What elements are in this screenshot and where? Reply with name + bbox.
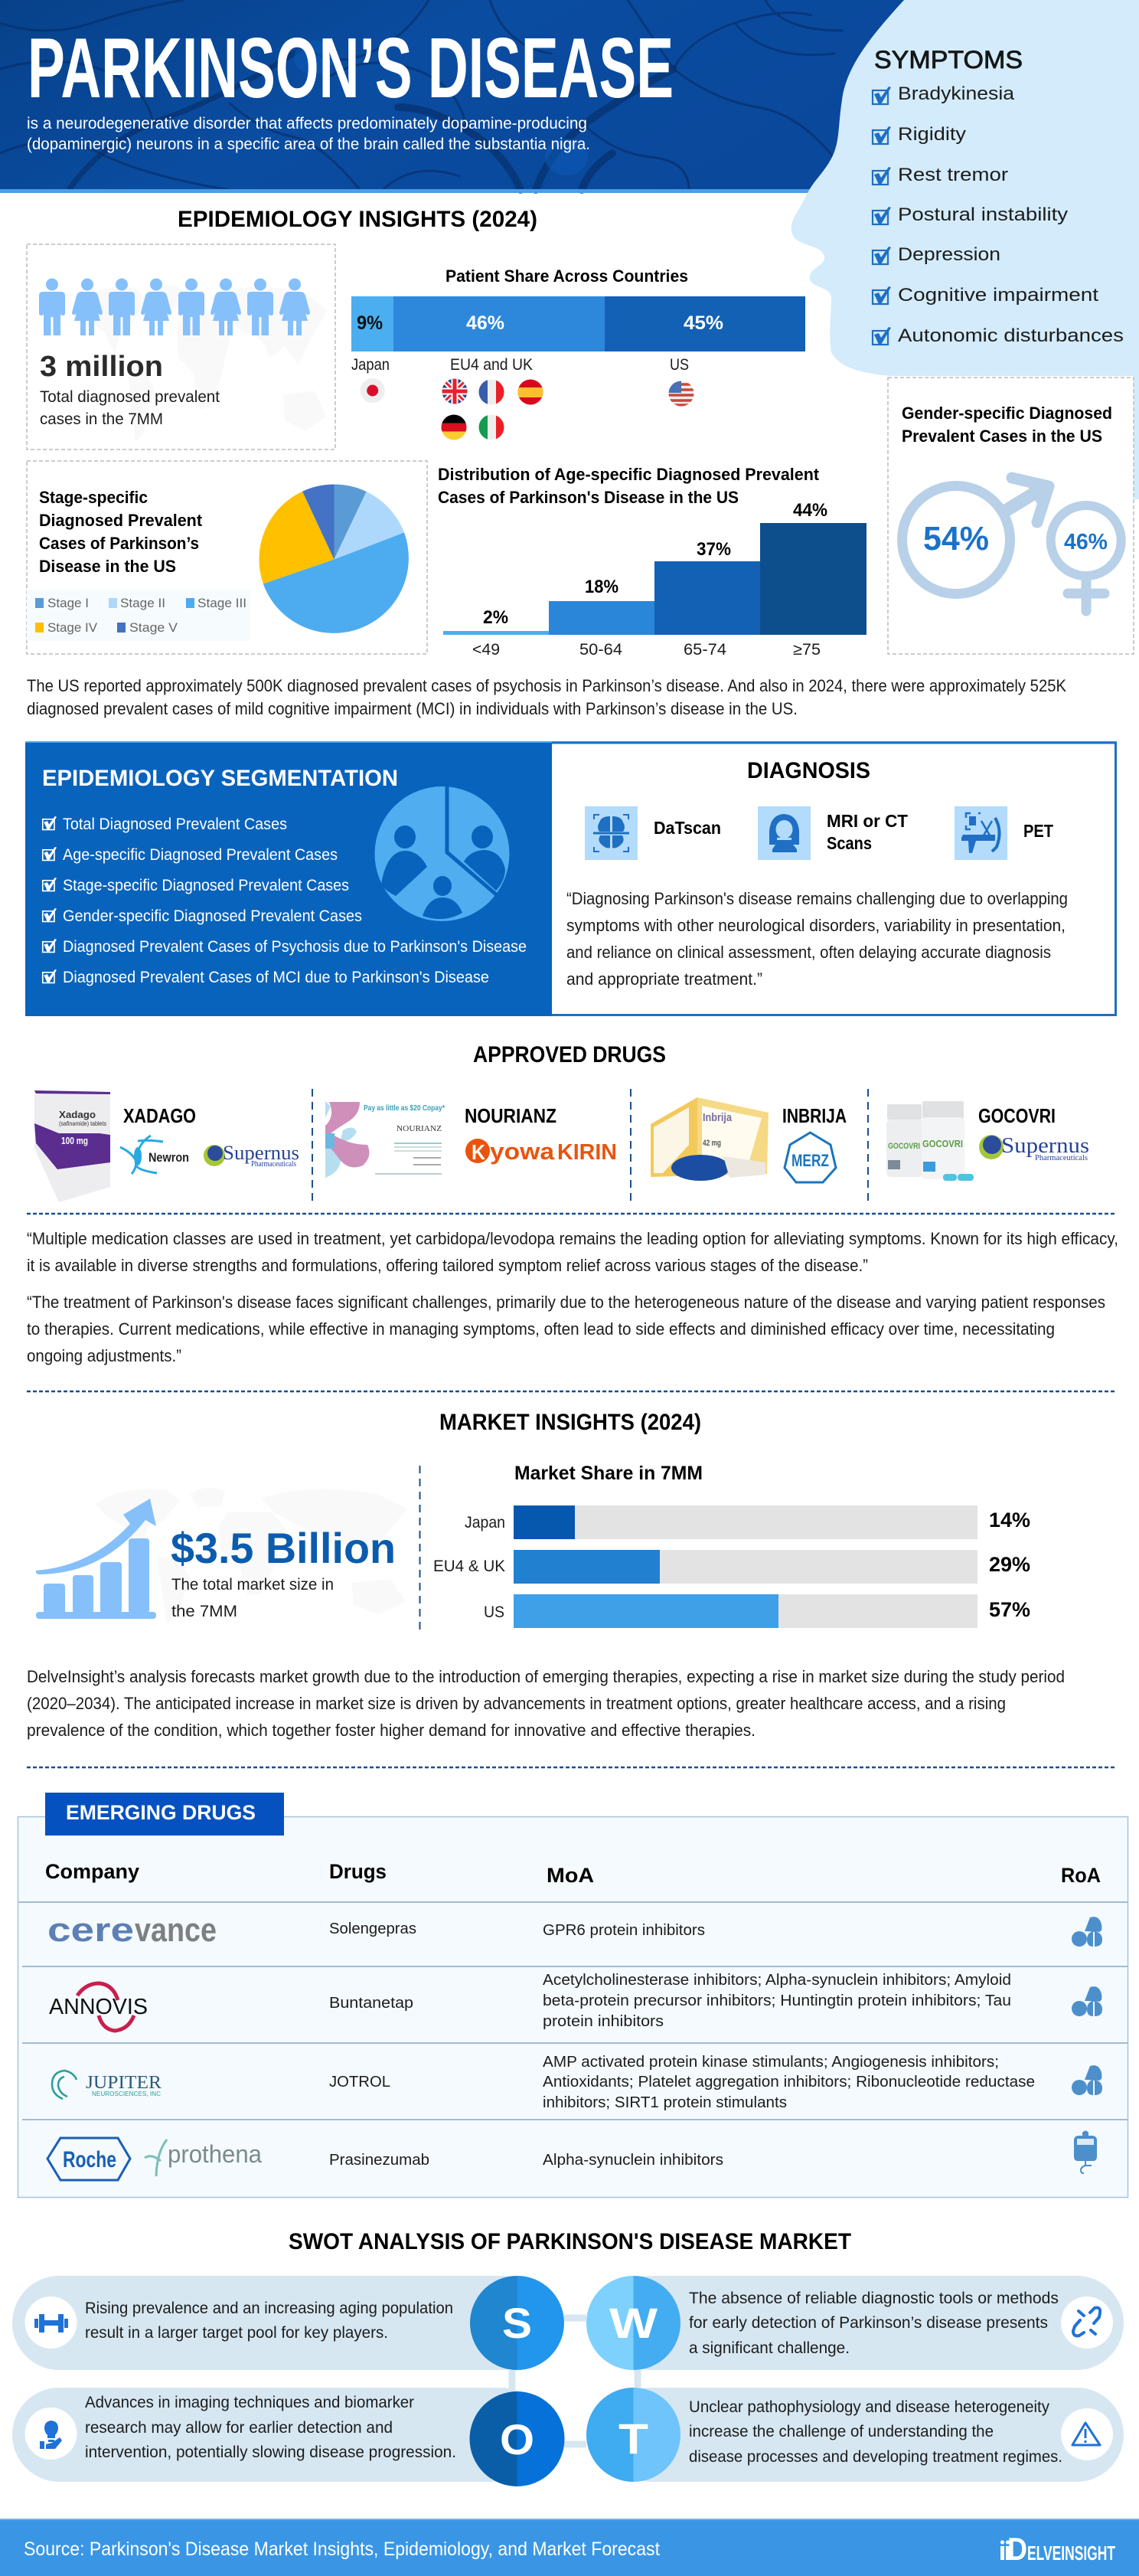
panel: threats (586, 2388, 1124, 2482)
logo: Supernus: Supernus (1001, 1133, 1089, 1158)
chart: patient share across countries: 45% (684, 312, 723, 334)
icon: MRI scanner (758, 806, 811, 860)
W badge: W (609, 2299, 658, 2347)
chart: market share in 7MM: US (484, 1603, 504, 1621)
opportunities text: research may allow for earlier detection and (85, 2419, 393, 2437)
row: Buntanetap: protein inhibitors (543, 2013, 664, 2030)
market caption: The total market size in (171, 1576, 334, 1594)
pie legend: Stage II (120, 596, 165, 610)
S badge (470, 2276, 564, 2370)
market caption (171, 1576, 334, 1620)
icon: dumbbell (24, 2296, 77, 2349)
weaknesses text: a significant challenge. (689, 2339, 850, 2357)
row: Prasinezumab: Prasinezumab (329, 2152, 429, 2169)
female share: 46% (1064, 530, 1108, 554)
row: Solengepras (47, 1911, 1102, 1949)
logo: Jupiter Neurosciences (52, 2071, 162, 2099)
icon: flag Spain (517, 379, 543, 405)
logo: Roche (47, 2138, 130, 2180)
PET label: PET (1023, 821, 1053, 841)
chart: age-specific distribution: ≥75 (793, 641, 821, 659)
panel: epidemiology segmentation (25, 741, 1117, 1016)
chart: market share in 7MM: EU4 & UK (433, 1558, 505, 1575)
logo: Merz (785, 1133, 836, 1182)
threats text: Unclear pathophysiology and disease heterogeneity (689, 2398, 1049, 2416)
chart: age-specific distribution: 2% (483, 607, 508, 628)
opportunities text: intervention, potentially slowing disease progression. (85, 2444, 456, 2461)
heading: SWOT: SWOT ANALYSIS OF PARKINSON'S DISEASE MARKET (289, 2229, 851, 2254)
SWOT connectors (512, 2318, 638, 2444)
text: medication quote (27, 1229, 1118, 1275)
diagnosis quote: and appropriate treatment.” (566, 969, 762, 989)
chart: patient share across countries: Japan (351, 356, 390, 374)
logo: DelveInsight (1000, 2531, 1115, 2567)
text: psychosis and MCI note: The US reported approximately 500K diagnosed prevalent cases of psychosis in Parkinson’s disease. And also in 2024, there were approximately 525K (27, 676, 1066, 695)
title: PARKINSON’S DISEASE (28, 21, 674, 116)
pie legend: Stage III (197, 596, 246, 610)
symptoms checklist: Rigidity (898, 124, 966, 145)
segmentation checklist: Gender-specific Diagnosed Prevalent Cases (63, 907, 362, 925)
row: Buntanetap (49, 1972, 1102, 2031)
symptoms checklist: Rest tremor (898, 165, 1008, 185)
row: JOTROL: AMP activated protein kinase stimulants; Angiogenesis inhibitors; (543, 2054, 999, 2071)
logo: Newron (120, 1136, 189, 1174)
panel: strengths (12, 2276, 564, 2370)
row: JOTROL: inhibitors; SIRT1 protein stimulants (543, 2094, 787, 2111)
drug name: NOURIANZ (465, 1104, 556, 1127)
male share: 54% (923, 520, 989, 557)
text: market forecast (27, 1667, 1065, 1740)
chart: patient share across countries: US (670, 356, 689, 374)
icon: flag France (478, 379, 505, 405)
opportunities text (85, 2394, 456, 2461)
logo: DelveInsight: D (1007, 2531, 1027, 2567)
logo: Annovis (49, 1983, 148, 2031)
text: medication quote: it is available in diverse strengths and formulations, offering tailored symptom relief across various stages of the disease.” (27, 1256, 868, 1275)
O badge: O (500, 2415, 534, 2463)
logo: Kyowa Kirin: K (472, 1140, 485, 1164)
icon: flag Germany (441, 414, 467, 441)
threats text: disease processes and developing treatment regimes. (689, 2448, 1062, 2466)
logo: Roche: Roche (63, 2147, 116, 2172)
pack: Inbrija box and inhaler: Inbrija (703, 1111, 733, 1124)
text: market forecast: prevalence of the condition, which together foster higher demand for innovative and effective therapies. (27, 1721, 756, 1740)
logo: Kyowa Kirin: yowa (490, 1138, 555, 1165)
icon: PET scan (955, 806, 1007, 860)
panel: market size (36, 1488, 407, 1624)
chart: age-specific distribution: Cases of Parkinson's Disease in the US (438, 488, 739, 507)
stage heading: Disease in the US (39, 557, 176, 576)
MRI or CT label: Scans (827, 833, 872, 853)
weaknesses text: The absence of reliable diagnostic tools or methods (689, 2290, 1059, 2307)
pie legend: Stage V (129, 620, 178, 635)
segmentation checklist: Diagnosed Prevalent Cases of Psychosis due to Parkinson's Disease (63, 938, 527, 956)
total caption: Total diagnosed prevalent (40, 388, 220, 406)
header description: (dopaminergic) neurons in a specific area of the brain called the substantia nigra. (27, 136, 590, 153)
header description (27, 115, 590, 153)
icon: warning triangle (1061, 2408, 1113, 2460)
row: Solengepras: cere (47, 1911, 134, 1949)
logo: Jupiter Neurosciences: JUPITER (86, 2073, 162, 2093)
heading: epidemiology insights: EPIDEMIOLOGY INSIGHTS (2024) (178, 207, 537, 232)
row: Solengepras: vance (135, 1911, 217, 1949)
gender heading: Gender-specific Diagnosed (902, 404, 1112, 423)
row: Solengepras: GPR6 protein inhibitors (543, 1922, 705, 1939)
weaknesses text (689, 2290, 1059, 2357)
total caption (40, 388, 220, 428)
panel: total diagnosed cases (27, 244, 335, 449)
logo: Merz: MERZ (791, 1151, 829, 1170)
chart: age-specific distribution: 50-64 (579, 641, 622, 659)
icon: female symbol (1051, 505, 1121, 611)
panel: emerging drugs table (18, 1793, 1128, 2198)
drug: Nourianz (325, 1101, 617, 1178)
chart: patient share across countries: 9% (357, 312, 383, 334)
row: Solengepras: Solengepras (329, 1921, 416, 1937)
logo: Supernus (204, 1142, 299, 1169)
chart: market share in 7MM: Market Share in 7MM (514, 1463, 703, 1484)
total value: 3 million (40, 351, 163, 383)
icon: flag Japan (361, 378, 385, 403)
row: Prasinezumab (47, 2130, 1097, 2180)
chart: age-specific distribution: 37% (697, 539, 731, 560)
strengths text: result in a larger target pool for key players. (85, 2324, 388, 2342)
logo: Newron: Newron (148, 1150, 189, 1165)
row: Buntanetap: Acetylcholinesterase inhibitors; Alpha-synuclein inhibitors; Amyloid (543, 1972, 1011, 1989)
chart: market share in 7MM: 14% (989, 1509, 1030, 1532)
diagnosis quote: symptoms with other neurological disorders, variability in presentation, (566, 916, 1066, 935)
icon: IV bag (1074, 2130, 1097, 2173)
stage heading: Stage-specific (39, 488, 148, 507)
text: treatment challenges quote: to therapies. Current medications, while effective in managing symptoms, often lead to side effects and diminished efficacy over time, necessitating (27, 1319, 1055, 1339)
segmentation heading: EPIDEMIOLOGY SEGMENTATION (42, 766, 398, 791)
symptoms checklist: Depression (898, 244, 1000, 265)
chart: patient share across countries (351, 266, 805, 441)
panel: opportunities (12, 2388, 564, 2486)
chart: patient share across countries: EU4 and UK (450, 356, 533, 374)
header banner (0, 0, 1139, 193)
pack: Gocovri bottles (886, 1101, 974, 1181)
DaTscan label: DaTscan (654, 818, 721, 838)
row: JOTROL (52, 2054, 1102, 2111)
text: treatment challenges quote: ongoing adjustments.” (27, 1346, 181, 1365)
logo: Kyowa Kirin (465, 1138, 617, 1165)
pack: Xadago box: Xadago (59, 1109, 96, 1120)
chart: market share in 7MM (433, 1463, 1030, 1628)
chart: age-specific distribution: 44% (793, 500, 827, 521)
drug name: XADAGO (123, 1104, 196, 1127)
pack: Gocovri bottles: GOCOVRI (922, 1138, 963, 1149)
logo: Prothena: prothena (168, 2140, 262, 2168)
icon: flag USA (668, 381, 694, 407)
strengths text: Rising prevalence and an increasing aging population (85, 2300, 453, 2317)
icon: flag Italy (478, 414, 505, 440)
logo: Annovis: ANNOVIS (49, 1995, 148, 2019)
icon: flag UK (442, 378, 468, 404)
gender heading (902, 404, 1112, 446)
logo: Supernus (979, 1133, 1089, 1162)
drug name: GOCOVRI (978, 1104, 1056, 1127)
T badge (586, 2388, 680, 2482)
MRI or CT label: MRI or CT (827, 811, 908, 831)
chart: market share in 7MM: 57% (989, 1598, 1030, 1621)
total caption: cases in the 7MM (40, 410, 163, 428)
chart: market share in 7MM: Japan (465, 1514, 505, 1532)
logo: Supernus: Supernus (223, 1142, 299, 1164)
panel: gender-specific cases (888, 378, 1134, 654)
pie legend (27, 590, 250, 641)
pack: Xadago box: 100 mg (61, 1135, 88, 1146)
pack: Nourianz copay card: NOURIANZ (397, 1124, 442, 1133)
pack: Nourianz copay card: Pay as little as $20 Copay* (364, 1104, 445, 1113)
market value: $3.5 Billion (171, 1524, 396, 1572)
text: treatment challenges quote (27, 1293, 1105, 1365)
segmentation checklist: Total Diagnosed Prevalent Cases (63, 816, 287, 833)
panel: symptoms head silhouette (791, 0, 1139, 499)
stage heading: Diagnosed Prevalent (39, 511, 203, 530)
diagnosis heading: DIAGNOSIS (747, 758, 870, 783)
logo: Supernus: Pharmaceuticals (1035, 1153, 1088, 1162)
drug: Gocovri (886, 1101, 1089, 1181)
W badge (586, 2276, 680, 2370)
table header (45, 1860, 1101, 1887)
row: Buntanetap: Buntanetap (329, 1995, 413, 2012)
pack: Gocovri bottles: GOCOVRI (888, 1142, 920, 1151)
icon: idea hand (24, 2408, 77, 2460)
stage heading (39, 488, 203, 576)
diagnosis quote (566, 889, 1068, 989)
symptoms heading: SYMPTOMS (874, 46, 1023, 74)
row: Prasinezumab: Alpha-synuclein inhibitors (543, 2152, 723, 2169)
pie legend: Stage IV (47, 620, 98, 635)
icon: people row (39, 279, 310, 335)
table header: Company (45, 1860, 139, 1883)
footer bar (0, 2519, 1139, 2576)
pie legend: Stage I (47, 596, 89, 610)
table header: RoA (1061, 1864, 1101, 1887)
diagnosis quote: “Diagnosing Parkinson's disease remains challenging due to overlapping (566, 889, 1068, 908)
source text: Source: Parkinson's Disease Market Insights, Epidemiology, and Market Forecast (24, 2538, 660, 2560)
symptoms checklist: Cognitive impairment (898, 285, 1098, 306)
symptoms checklist: Autonomic disturbances (898, 325, 1124, 346)
icon: population pie (375, 784, 510, 921)
text: psychosis and MCI note (27, 676, 1066, 718)
chart: market share in 7MM: 29% (989, 1553, 1030, 1576)
panel: diagnosis (552, 743, 1116, 1015)
tab heading: EMERGING DRUGS (66, 1801, 256, 1824)
segmentation checklist: Stage-specific Diagnosed Prevalent Cases (63, 877, 349, 894)
icon: DaTscan brain (585, 806, 638, 860)
row: Buntanetap: beta-protein precursor inhibitors; Huntingtin protein inhibitors; Tau (543, 1992, 1011, 2009)
symptoms checklist: Bradykinesia (898, 83, 1015, 104)
pack: Inbrija box and inhaler (651, 1097, 769, 1181)
MRI or CT label (827, 811, 908, 853)
chart: age-specific distribution: 18% (585, 577, 618, 597)
logo: Prothena (145, 2140, 262, 2176)
row: JOTROL: JOTROL (329, 2074, 390, 2091)
drug name: INBRIJA (782, 1104, 847, 1127)
segmentation checklist: Diagnosed Prevalent Cases of MCI due to Parkinson's Disease (63, 969, 489, 986)
table header: Drugs (329, 1860, 387, 1883)
T badge: T (618, 2414, 648, 2463)
threats text (689, 2398, 1062, 2466)
chart: age-specific distribution: Distribution of Age-specific Diagnosed Prevalent (438, 465, 820, 484)
panel: stage-specific cases (27, 461, 427, 654)
S badge: S (502, 2299, 532, 2347)
icon: broken link (1061, 2296, 1113, 2349)
strengths text (85, 2300, 453, 2342)
chart: age-specific distribution: 65-74 (684, 641, 726, 659)
logo: Jupiter Neurosciences: NEUROSCIENCES, INC (92, 2091, 161, 2097)
diagnosis quote: and reliance on clinical assessment, often delaying accurate diagnosis (566, 943, 1051, 962)
icon: male symbol (902, 478, 1049, 594)
text: market forecast: DelveInsight’s analysis forecasts market growth due to the introduction of emerging therapies, expecting a rise in market size during the study period (27, 1667, 1065, 1686)
tab heading (45, 1793, 284, 1836)
heading: approved drugs: APPROVED DRUGS (473, 1042, 666, 1067)
text: market forecast: (2020–2034). The anticipated increase in market size is driven by advancements in treatment options, greater healthcare access, and a rising (27, 1694, 1006, 1713)
stage heading: Cases of Parkinson’s (39, 534, 199, 553)
symptoms checklist (873, 83, 1124, 346)
gender heading: Prevalent Cases in the US (902, 427, 1102, 446)
chart: patient share across countries: 46% (466, 312, 504, 334)
heading: market insights: MARKET INSIGHTS (2024) (439, 1410, 701, 1435)
chart: patient share across countries: Patient Share Across Countries (445, 266, 688, 286)
threats text: increase the challenge of understanding the (689, 2423, 994, 2440)
O badge (469, 2391, 564, 2486)
chart: age-specific distribution (438, 465, 866, 659)
pack: Xadago box (34, 1090, 110, 1202)
text: psychosis and MCI note: diagnosed prevalent cases of mild cognitive impairment (MCI) in individuals with Parkinson’s disease in the US. (27, 699, 798, 718)
pack: Nourianz copay card (325, 1101, 445, 1178)
row: JOTROL: Antioxidants; Platelet aggregation inhibitors; Ribonucleotide reductase (543, 2074, 1035, 2091)
segmentation checklist (43, 816, 527, 986)
opportunities text: Advances in imaging techniques and biomarker (85, 2394, 414, 2411)
logo: Kyowa Kirin: KIRIN (557, 1140, 617, 1165)
logo: Supernus: Pharmaceuticals (251, 1160, 296, 1169)
segmentation checklist: Age-specific Diagnosed Prevalent Cases (63, 846, 338, 864)
market caption: the 7MM (171, 1603, 237, 1620)
pie chart (259, 484, 409, 633)
table header: MoA (547, 1864, 594, 1887)
chart: age-specific distribution: <49 (472, 641, 500, 659)
weaknesses text: for early detection of Parkinson’s disease presents (689, 2314, 1048, 2332)
icon: growth chart (36, 1499, 156, 1619)
drug: Xadago (34, 1090, 299, 1202)
drug: Inbrija (651, 1097, 847, 1182)
pack: Xadago box: (safinamide) tablets (59, 1120, 106, 1127)
panel: weaknesses (586, 2276, 1124, 2370)
pack: Inbrija box and inhaler: 42 mg (703, 1139, 721, 1148)
header description: is a neurodegenerative disorder that affects predominately dopamine-producing (27, 115, 587, 132)
symptoms checklist: Postural instability (898, 204, 1068, 225)
